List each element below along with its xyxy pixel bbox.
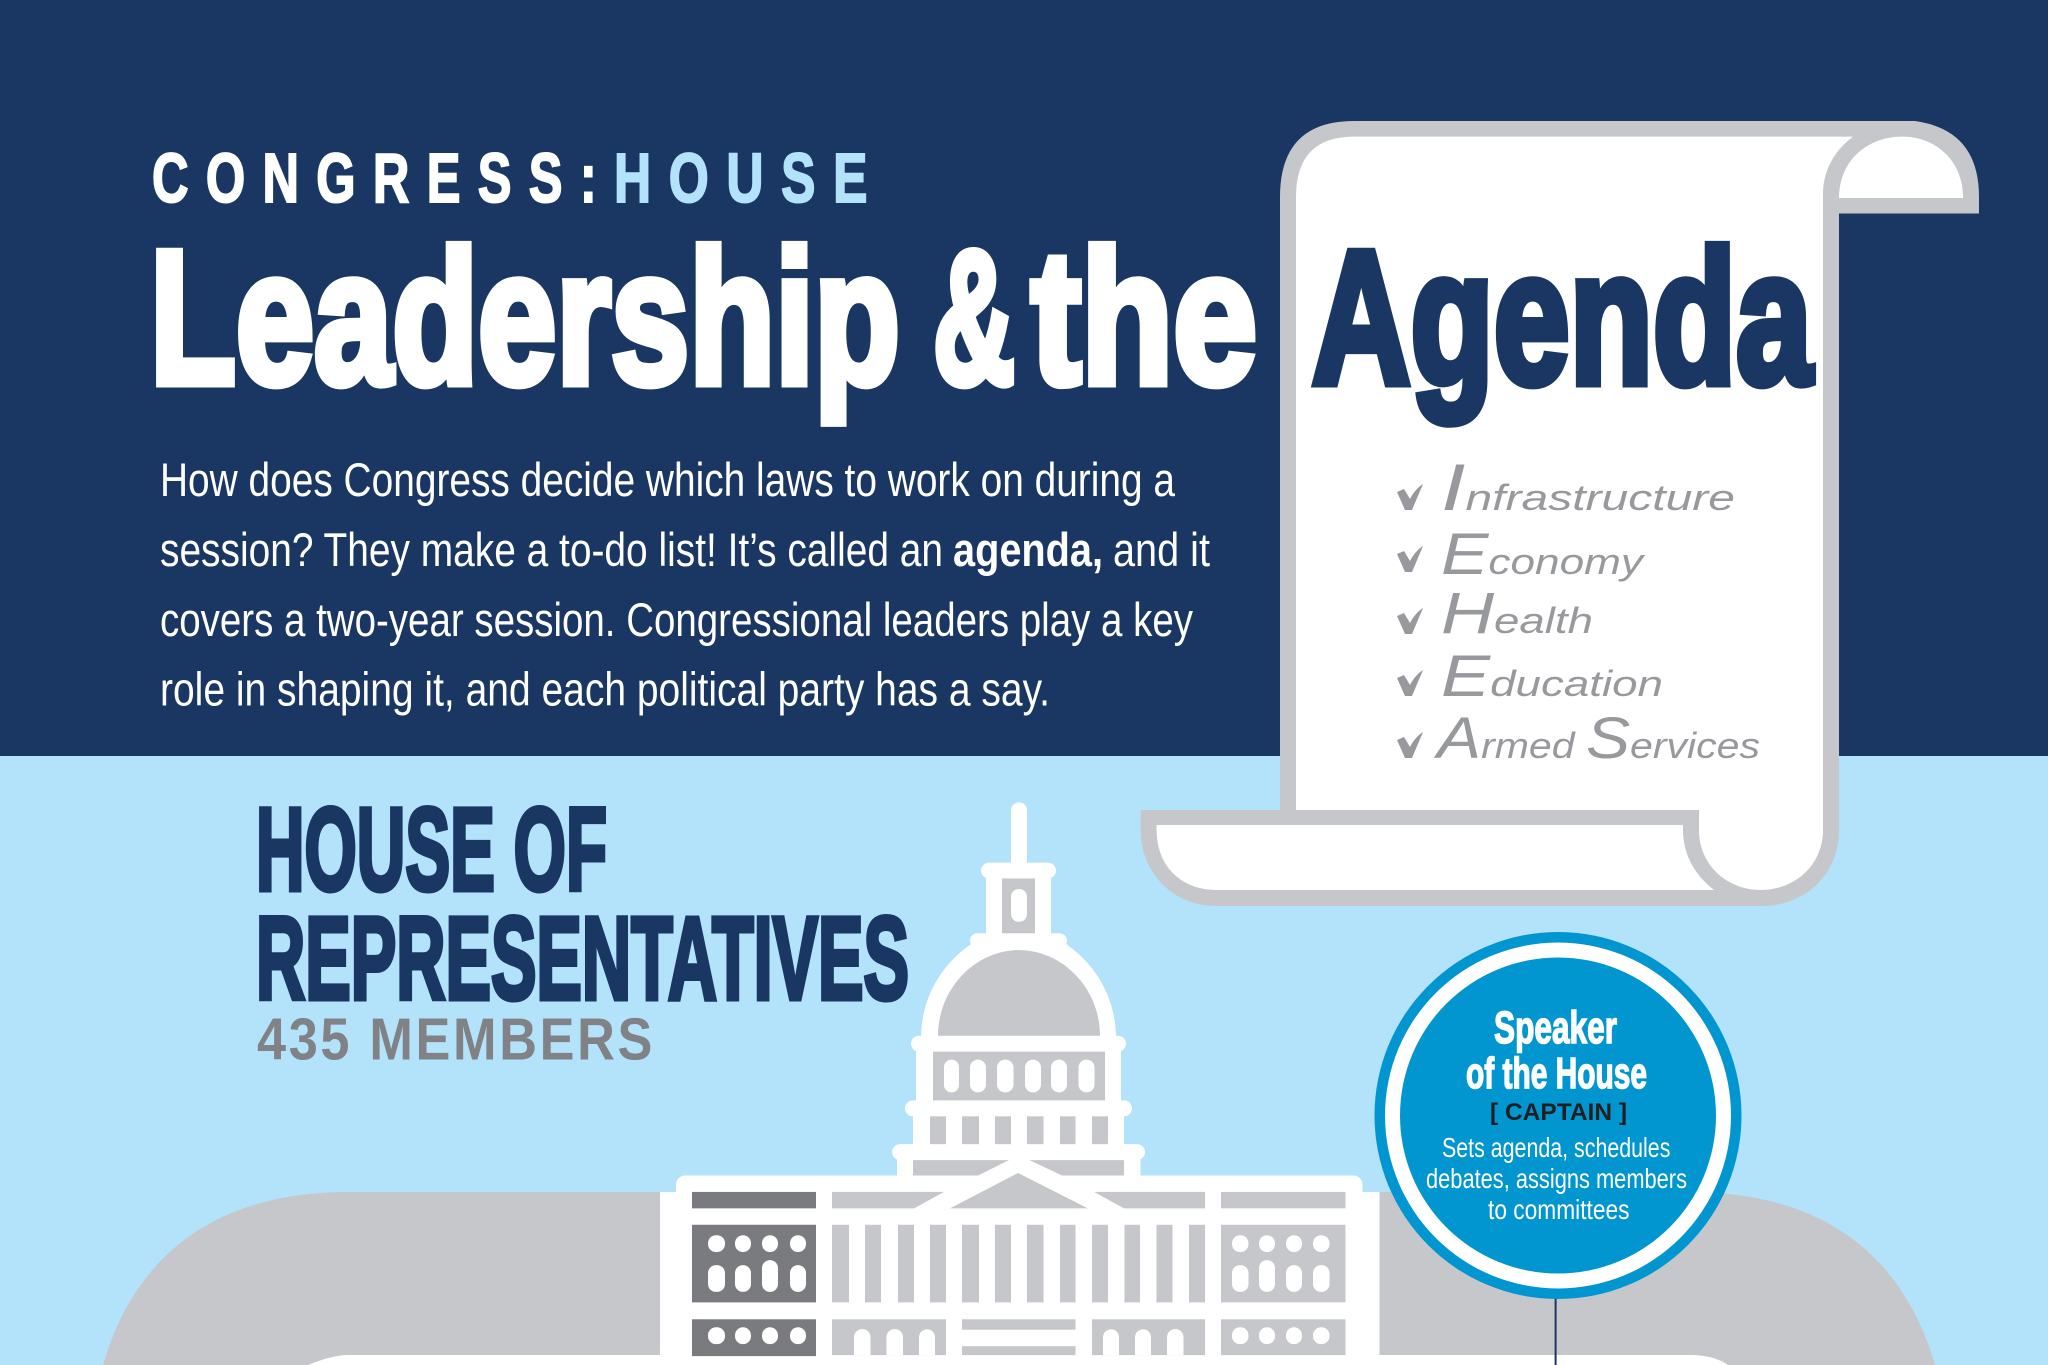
item: education: E ducation <box>1441 644 1663 709</box>
scroll icon <box>1141 121 1979 906</box>
intro paragraph: role in shaping it, and each political party has a say. <box>160 663 1050 716</box>
heading: house of representatives: REPRESENTATIVES <box>256 893 909 1025</box>
kicker: congress house: HOUSE <box>614 139 885 217</box>
heading: house of representatives <box>256 784 909 1025</box>
speaker title: Speaker <box>1494 1002 1617 1053</box>
speaker description <box>1426 1132 1687 1225</box>
captain label: [ CAPTAIN ] <box>1490 1099 1627 1126</box>
intro paragraph: agenda, <box>953 523 1103 576</box>
speaker title: of the House <box>1466 1049 1647 1098</box>
speaker description: Sets agenda, schedules <box>1442 1132 1670 1163</box>
speaker title <box>1466 1002 1647 1098</box>
dark west wing windows <box>692 1192 816 1356</box>
lantern and dome gray <box>832 879 1346 1355</box>
intro paragraph: session? They make a to-do list! It’s called an <box>160 523 943 576</box>
capitol building <box>660 802 1380 1365</box>
title: leadership and the agenda: Leadership <box>150 212 900 424</box>
white bottom panel <box>308 1355 1728 1365</box>
speaker description: debates, assigns members <box>1426 1163 1687 1194</box>
intro paragraph: covers a two-year session. Congressional leaders play a key <box>160 593 1193 646</box>
item: economy: Economy <box>1441 522 1645 587</box>
title: leadership and the agenda: the <box>1031 212 1257 424</box>
check: health <box>1397 608 1423 634</box>
kicker: congress house: CONGRESS: <box>152 139 614 217</box>
connector line from speaker <box>1555 1295 1557 1365</box>
check: infrastructure <box>1397 484 1423 510</box>
member count: 435 MEMBERS <box>257 1006 655 1072</box>
navy header background <box>0 0 2048 756</box>
heading: house of representatives: HOUSE OF <box>256 784 607 916</box>
intro paragraph: How does Congress decide which laws to work on during a <box>160 453 1176 506</box>
agenda checklist <box>1397 450 1760 771</box>
check: armed services <box>1397 732 1423 758</box>
check: education <box>1397 670 1423 696</box>
item: health: H ealth <box>1441 581 1593 646</box>
capitol white silhouette <box>660 802 1380 1365</box>
intro paragraph: and it <box>1113 523 1210 576</box>
intro paragraph <box>160 453 1210 716</box>
item: infrastructure: Infrastructure <box>1441 450 1735 524</box>
title: leadership and the agenda: & <box>933 212 1015 424</box>
white window openings <box>708 1060 1330 1355</box>
title: leadership and the agenda: Agenda <box>1312 212 1813 424</box>
light blue lower background <box>0 756 2048 1365</box>
gray ground hill <box>103 1192 1935 1365</box>
check: economy <box>1397 546 1423 572</box>
speaker description: to committees <box>1488 1194 1630 1225</box>
speaker of the house badge <box>1374 932 1742 1299</box>
title: leadership and the agenda <box>150 212 1813 424</box>
item: armed services: Armed Services <box>1434 706 1760 771</box>
